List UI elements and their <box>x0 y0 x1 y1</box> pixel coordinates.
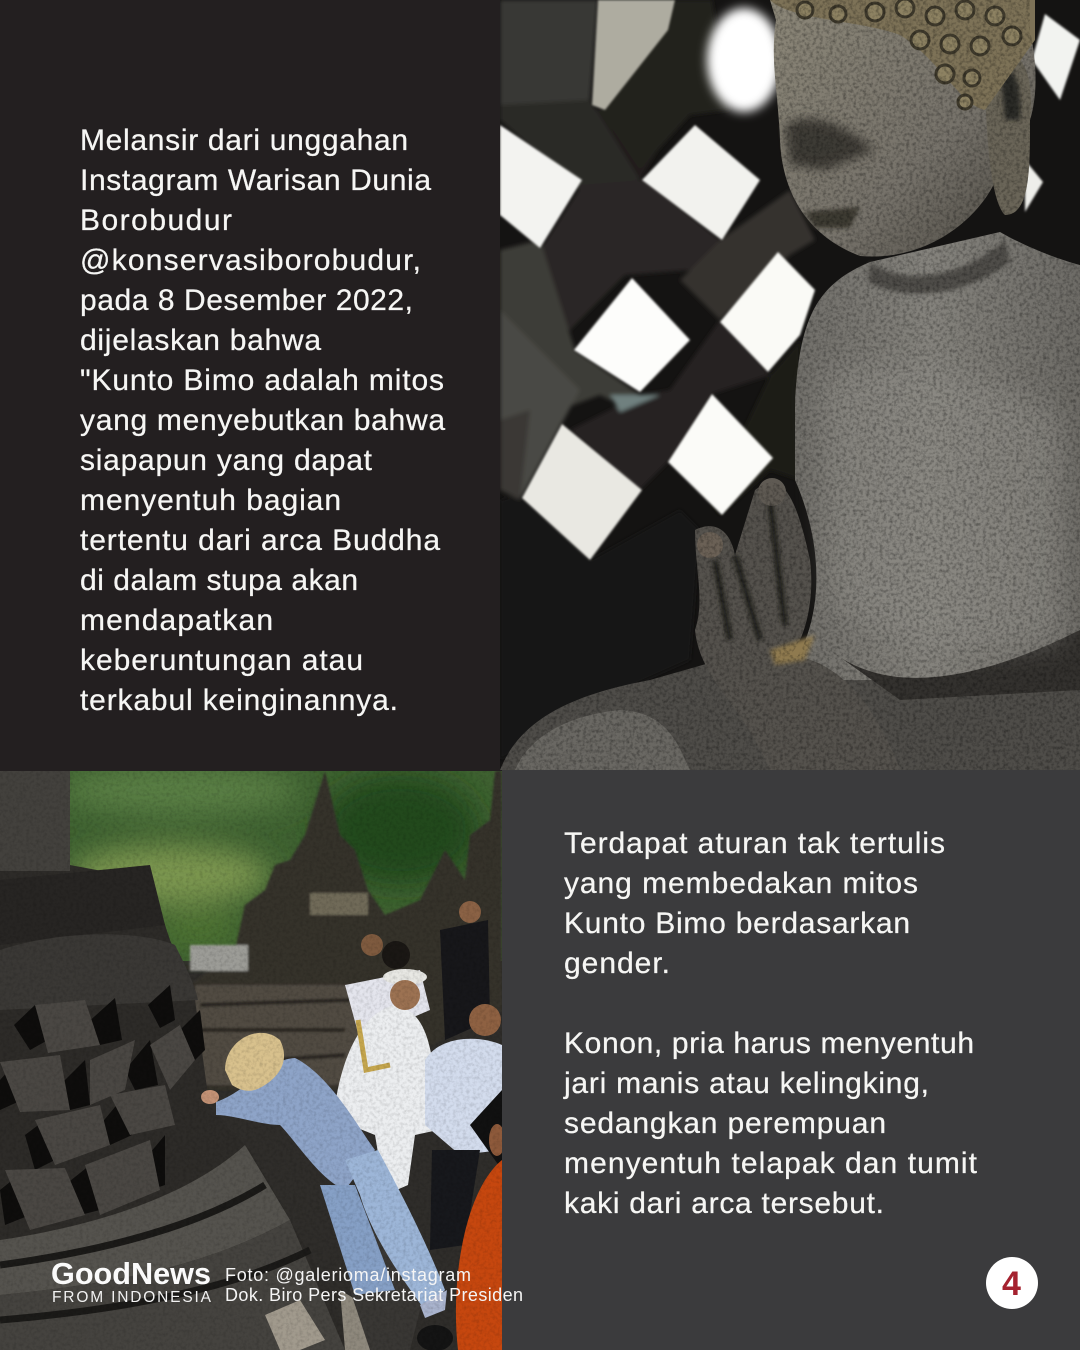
text block: unwritten gender rule: Kunto Bimo berdasarkan <box>564 907 910 940</box>
photo: Buddha statue inside stupa <box>500 0 1080 770</box>
light openings in the stupa lattice <box>500 0 1080 560</box>
text block: left paragraph on Kunto Bimo myth: Borobudur <box>80 204 232 237</box>
photo credits: Foto: @galerioma/instagram <box>225 1265 471 1285</box>
text block: what men and women touch: Konon, pria harus menyentuh <box>564 1027 974 1060</box>
temple stupas and walls <box>190 771 502 1090</box>
text block: left paragraph on Kunto Bimo myth: mendapatkan <box>80 604 273 637</box>
text block: what men and women touch: jari manis atau kelingking, <box>563 1067 929 1100</box>
bystanders <box>440 920 490 1040</box>
statue hand <box>695 487 844 680</box>
panel: dark text background <box>0 0 500 771</box>
text block: left paragraph on Kunto Bimo myth: tertentu dari arca Buddha <box>80 524 440 557</box>
logo: GoodNews from Indonesia: GoodNews <box>51 1256 211 1291</box>
text block: left paragraph on Kunto Bimo myth: di dalam stupa akan <box>80 564 358 597</box>
text block: left paragraph on Kunto Bimo myth: dijelaskan bahwa <box>80 324 321 357</box>
text block: left paragraph on Kunto Bimo myth: Melansir dari unggahan <box>80 124 408 157</box>
text block: left paragraph on Kunto Bimo myth: Instagram Warisan Dunia <box>80 164 431 197</box>
text block: what men and women touch <box>563 1027 978 1220</box>
text block: left paragraph on Kunto Bimo myth: terkabul keinginannya. <box>80 684 398 717</box>
visitor in blue suit <box>201 1033 447 1318</box>
large stupa <box>50 865 206 1088</box>
page number badge: 4 <box>1002 1265 1021 1303</box>
text block: left paragraph on Kunto Bimo myth: @konservasiborobudur, <box>80 244 421 277</box>
text block: left paragraph on Kunto Bimo myth: pada 8 Desember 2022, <box>80 284 413 317</box>
statue body <box>795 232 1080 680</box>
photo credits: Dok. Biro Pers Sekretariat Presiden <box>225 1285 523 1305</box>
text block: unwritten gender rule: gender. <box>564 947 670 980</box>
text block: what men and women touch: menyentuh telapak dan tumit <box>564 1147 978 1180</box>
forest background <box>50 771 502 961</box>
text block: left paragraph on Kunto Bimo myth: yang menyebutkan bahwa <box>80 404 445 437</box>
logo: GoodNews from Indonesia <box>51 1256 212 1306</box>
logo: GoodNews from Indonesia: FROM INDONESIA <box>52 1289 212 1306</box>
photo credits <box>225 1265 523 1305</box>
text block: left paragraph on Kunto Bimo myth: "Kunto Bimo adalah mitos <box>80 364 444 397</box>
text block: unwritten gender rule: Terdapat aturan tak tertulis <box>564 827 945 860</box>
text block: left paragraph on Kunto Bimo myth: menyentuh bagian <box>80 484 341 517</box>
text block: unwritten gender rule: yang membedakan mitos <box>564 867 918 900</box>
text block: unwritten gender rule <box>564 827 945 980</box>
text block: left paragraph on Kunto Bimo myth: siapapun yang dapat <box>80 444 373 477</box>
paving stones <box>265 1300 325 1350</box>
page number badge <box>986 1257 1038 1309</box>
text block: left paragraph on Kunto Bimo myth: keberuntungan atau <box>80 644 363 677</box>
text block: what men and women touch: sedangkan perempuan <box>564 1107 886 1140</box>
orange monk robe <box>456 1160 502 1350</box>
panel: grey text background <box>502 770 1080 1350</box>
photo: visitor reaching into stupa at Borobudur <box>0 765 505 1350</box>
statue head <box>770 0 1036 257</box>
text block: left paragraph on Kunto Bimo myth <box>80 124 445 717</box>
text block: what men and women touch: kaki dari arca tersebut. <box>564 1187 884 1220</box>
